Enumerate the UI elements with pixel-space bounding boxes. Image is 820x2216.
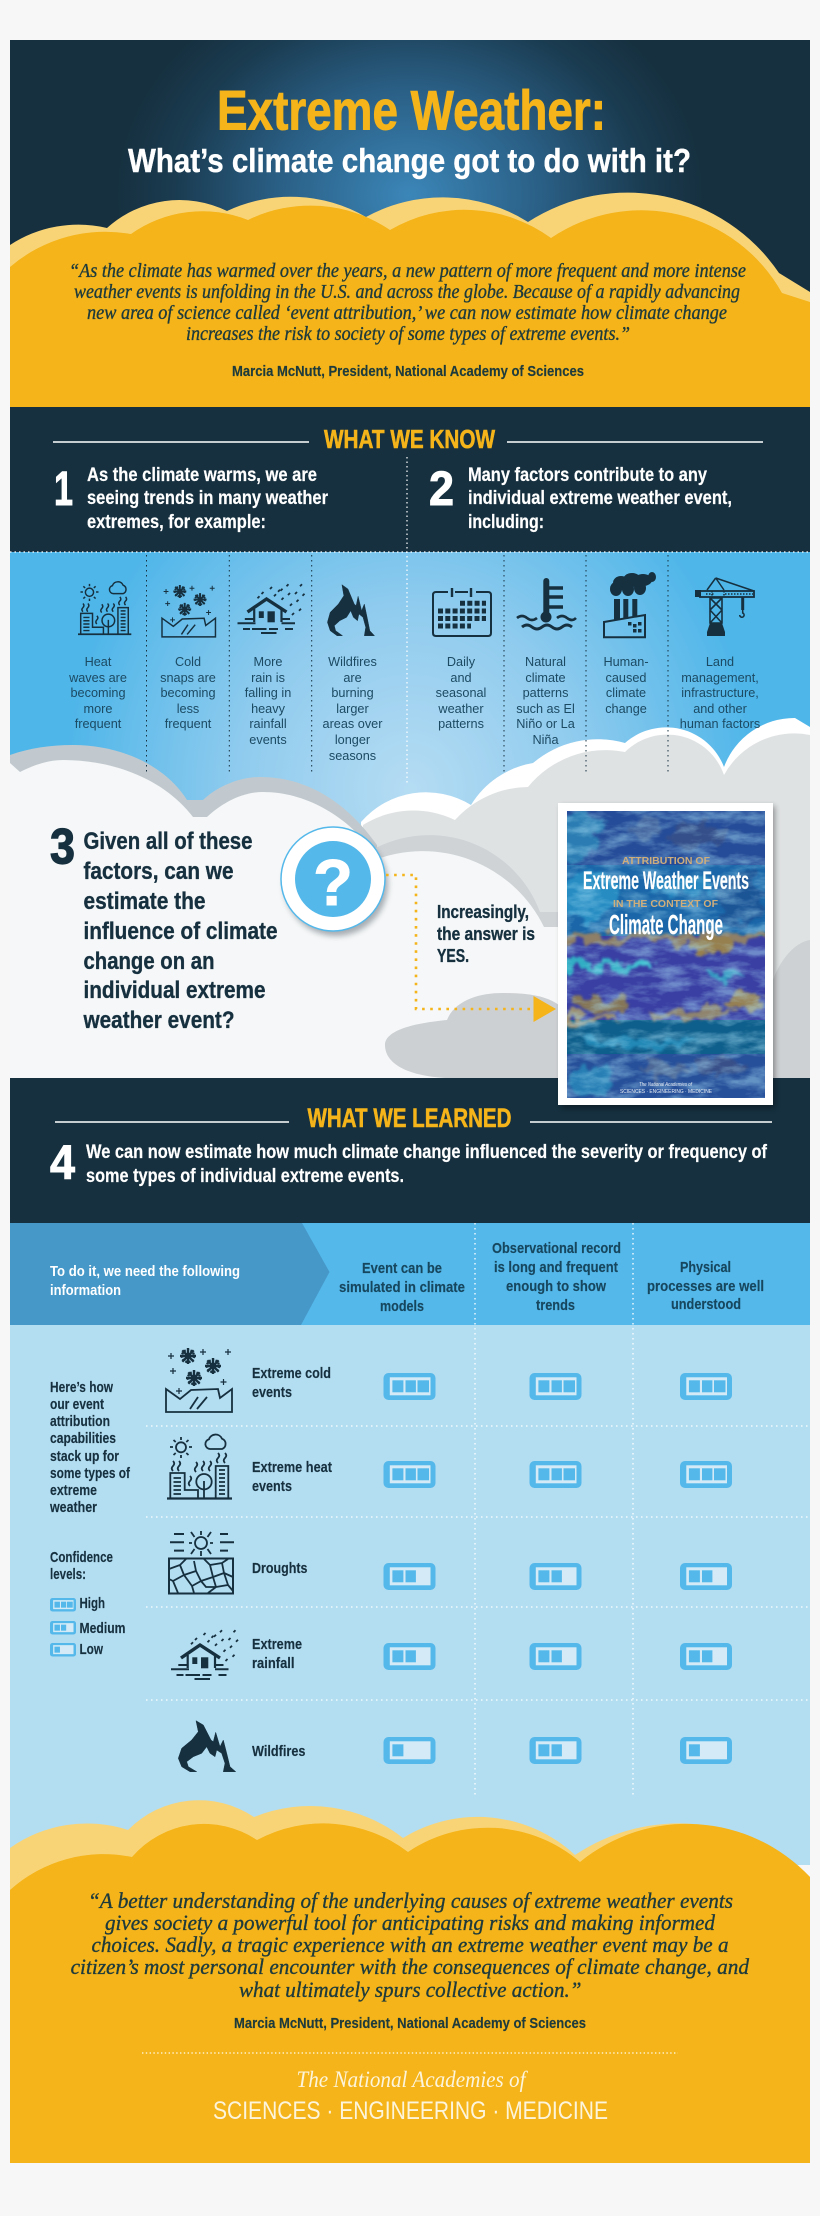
labels: factors: change — [605, 702, 647, 716]
labels: factors: human factors — [680, 717, 760, 731]
text: question: weather event? — [83, 1007, 234, 1034]
number 2: 2 — [429, 463, 454, 516]
text: point 2: including: — [468, 512, 544, 533]
labels: factors: patterns — [523, 686, 568, 700]
book title: SCIENCES · ENGINEERING · MEDICINE — [620, 1089, 713, 1095]
labels: factors: such as El — [516, 702, 575, 716]
text: point 2 — [468, 465, 732, 533]
labels: trends: rain is — [251, 671, 285, 685]
text: point 1: As the climate warms, we are — [87, 465, 317, 486]
icon: extreme heat — [167, 1435, 232, 1498]
header rule: what we know — [53, 441, 763, 443]
legend: confidence levels — [50, 1549, 126, 1658]
labels: trends: burning — [331, 686, 374, 700]
front cloud — [10, 206, 810, 407]
legend: confidence levels: High — [80, 1595, 105, 1612]
text: point 2: Many factors contribute to any — [468, 465, 707, 486]
text: answer: YES. — [437, 946, 469, 966]
labels: trends: More — [254, 655, 282, 669]
quote: bottom: gives society a powerful tool for anticipating risks and making informed — [105, 1910, 716, 1935]
column header 3: understood — [671, 1296, 741, 1313]
row label: extreme cold: Extreme cold — [252, 1365, 331, 1382]
book title: IN THE CONTEXT OF — [613, 898, 719, 910]
column header 1: Event can be — [362, 1260, 442, 1277]
labels: factors: management, — [681, 671, 759, 685]
text: point 4: some types of individual extreme events. — [86, 1166, 404, 1187]
text: answer — [437, 902, 535, 966]
quote: bottom: “A better understanding of the underlying causes of extreme weather events — [88, 1888, 733, 1913]
quote: top: weather events is unfolding in the U.S. and across the globe. Because of a rapidly advancing — [74, 281, 740, 303]
book title: Climate Change — [609, 909, 723, 940]
book title: ATTRIBUTION OF — [622, 855, 711, 867]
header rule: what we learned — [55, 1121, 772, 1123]
text: how capabilities stack up: extreme — [50, 1482, 97, 1499]
quote: top: new area of science called ‘event attribution,’ we can now estimate how climate change — [87, 302, 727, 324]
labels: trends: heavy — [251, 702, 286, 716]
confidence ratings: wildfires — [384, 1737, 732, 1764]
arrow: dotted to book — [386, 875, 556, 1022]
labels: factors: caused — [606, 671, 646, 685]
icon: extreme rainfall — [171, 1630, 238, 1679]
labels: trends: seasons — [329, 749, 376, 763]
labels: factors: Niño or La — [516, 717, 576, 731]
labels: trends: Wildfires — [328, 655, 377, 669]
text: question: Given all of these — [84, 828, 252, 855]
labels: factors: Land — [706, 655, 734, 669]
icon: heat waves — [78, 582, 131, 634]
labels: factors — [436, 655, 760, 747]
labels: trends: areas over — [323, 717, 383, 731]
text: point 1 — [87, 465, 329, 533]
text: how capabilities stack up: Here’s how — [50, 1379, 113, 1396]
labels: trends: more — [84, 702, 112, 716]
quote: top: “As the climate has warmed over the years, a new pattern of more frequent and more intense — [69, 260, 746, 282]
confidence ratings: extreme cold — [384, 1373, 732, 1400]
labels: trends: larger — [336, 702, 369, 716]
column header 1: models — [380, 1298, 424, 1315]
panel: blue icon band — [10, 552, 810, 892]
labels: trends: events — [249, 733, 287, 747]
icon: cold snaps — [162, 585, 215, 637]
column header 3: processes are well — [647, 1278, 764, 1295]
row label: extreme rainfall: Extreme — [252, 1636, 302, 1653]
confidence ratings: droughts — [384, 1563, 732, 1590]
text: point 2: individual extreme weather event, — [468, 488, 732, 509]
labels: factors: Daily — [447, 655, 476, 669]
row label: extreme heat — [252, 1459, 332, 1495]
labels: trends: are — [343, 671, 362, 685]
legend: confidence levels: Low — [80, 1641, 103, 1658]
title: Extreme Weather: — [217, 78, 606, 142]
text: how capabilities stack up: some types of — [50, 1465, 131, 1482]
icon: wildfire — [327, 585, 374, 636]
labels: trends: less — [177, 702, 199, 716]
column header 3 — [647, 1259, 764, 1313]
quote: bottom — [71, 1888, 750, 2002]
text: to do it — [50, 1263, 240, 1299]
logo: the national academies: SCIENCES · ENGINEERING · MEDICINE — [213, 2097, 608, 2125]
icon: rain on house — [238, 584, 304, 633]
icon: factory — [604, 572, 656, 637]
panel: lower cloud for answer — [372, 835, 559, 1078]
labels: trends: frequent — [165, 717, 212, 731]
confidence ratings: extreme rainfall — [384, 1643, 732, 1670]
quote attribution: bottom: Marcia McNutt, President, National Academy of Sciences — [234, 2016, 586, 2032]
column header 2: enough to show — [506, 1278, 606, 1295]
text: question — [83, 828, 277, 1034]
panel: right clouds — [361, 718, 810, 1078]
labels: factors: climate — [606, 686, 646, 700]
labels: trends — [68, 655, 383, 763]
quote attribution: top: Marcia McNutt, President, National Academy of Sciences — [232, 364, 584, 380]
text: point 1: extremes, for example: — [87, 512, 266, 533]
icon: extreme cold — [166, 1348, 232, 1412]
text: question: estimate the — [84, 888, 206, 915]
labels: factors: seasonal — [436, 686, 486, 700]
text: how capabilities stack up: attribution — [50, 1413, 110, 1430]
column header 2 — [492, 1240, 621, 1314]
icon: drought — [169, 1531, 234, 1594]
row label: extreme heat: events — [252, 1478, 292, 1495]
row label: extreme cold — [252, 1365, 331, 1401]
panel: left clouds — [10, 745, 385, 1078]
labels: factors: weather — [437, 702, 484, 716]
book cover — [558, 803, 775, 1108]
labels: factors: and other — [693, 702, 748, 716]
text: how capabilities stack up: weather — [49, 1499, 97, 1516]
labels: factors: and — [450, 671, 472, 685]
panel: table body — [10, 1325, 810, 1865]
text: question: influence of climate — [84, 918, 278, 945]
labels: factors: Niña — [532, 733, 559, 747]
icon: construction crane — [695, 578, 754, 636]
back cloud — [10, 193, 810, 320]
legend: confidence levels: Confidence — [50, 1549, 113, 1566]
labels: trends: rainfall — [249, 717, 287, 731]
row label: extreme rainfall: rainfall — [252, 1655, 294, 1672]
column header 1: simulated in climate — [339, 1279, 465, 1296]
book title — [583, 855, 749, 1095]
dividers: white dotted — [10, 457, 810, 783]
legend: confidence levels: Medium — [80, 1620, 126, 1637]
column header 3: Physical — [680, 1259, 731, 1276]
quote: bottom: what ultimately spurs collective action.” — [239, 1977, 582, 2002]
text: to do it: To do it, we need the following — [50, 1263, 240, 1280]
number 4: 4 — [50, 1137, 75, 1190]
quote: top — [69, 260, 746, 345]
column header 2: trends — [536, 1297, 575, 1314]
column header 2: Observational record — [492, 1240, 621, 1257]
labels: trends: becoming — [70, 686, 126, 700]
text: question: individual extreme — [84, 977, 266, 1004]
panel: footer — [10, 1800, 810, 2163]
confidence ratings: extreme heat — [384, 1461, 732, 1488]
text: answer: the answer is — [437, 924, 535, 944]
labels: factors: Natural — [525, 655, 566, 669]
subtitle: What’s climate change got to do with it? — [128, 142, 691, 179]
quote: bottom: citizen’s most personal encounter with the consequences of climate change, and — [71, 1954, 750, 1979]
quote: top: increases the risk to society of some types of extreme events.” — [186, 323, 630, 345]
labels: factors: patterns — [438, 717, 484, 731]
table dotted grid — [146, 1223, 810, 1797]
text: how capabilities stack up: stack up for — [50, 1448, 119, 1465]
column header 1 — [339, 1260, 465, 1315]
icon: wildfires — [178, 1721, 236, 1772]
row label: extreme rainfall — [252, 1636, 302, 1672]
number 1: 1 — [54, 463, 73, 516]
dividers: dark dotted — [146, 555, 668, 775]
quote: bottom: choices. Sadly, a tragic experience with an extreme weather event may be a — [92, 1932, 728, 1957]
text: how capabilities stack up: capabilities — [50, 1430, 116, 1447]
labels: trends: becoming — [160, 686, 216, 700]
labels: factors: infrastructure, — [681, 686, 759, 700]
text: question: factors, can we — [84, 858, 234, 885]
labels: trends: falling in — [245, 686, 291, 700]
icon: question mark: ? — [313, 846, 353, 919]
labels: trends: Cold — [175, 655, 201, 669]
labels: factors: Human- — [603, 655, 649, 669]
text: to do it: information — [50, 1282, 121, 1299]
logo: the national academies — [213, 2067, 608, 2125]
logo: the national academies: The National Academies of — [296, 2067, 529, 2092]
labels: trends: waves are — [68, 671, 127, 685]
labels: trends: Heat — [85, 655, 112, 669]
legend: confidence levels: levels: — [50, 1566, 86, 1583]
row label: extreme heat: Extreme heat — [252, 1459, 332, 1476]
text: point 1: seeing trends in many weather — [87, 488, 329, 509]
row label: wildfires: Wildfires — [252, 1743, 306, 1760]
row label: droughts: Droughts — [252, 1560, 308, 1577]
icon: question mark — [281, 827, 388, 936]
text: point 4 — [86, 1142, 768, 1187]
icon: thermometer in water — [517, 578, 576, 629]
text: how capabilities stack up: our event — [50, 1396, 104, 1413]
labels: trends: longer — [335, 733, 371, 747]
column header 2: is long and frequent — [494, 1259, 618, 1276]
heading: what we learned: WHAT WE LEARNED — [308, 1103, 512, 1133]
book title: The National Academies of — [639, 1082, 693, 1088]
panel: what we know — [10, 407, 810, 553]
icon: calendar — [433, 588, 491, 636]
text: how capabilities stack up — [49, 1379, 131, 1516]
panel: what we learned — [10, 1078, 810, 1224]
number 3: 3 — [50, 818, 75, 874]
panel: header — [10, 40, 810, 408]
text: answer: Increasingly, — [437, 902, 529, 922]
panel: table header — [10, 1223, 810, 1325]
row label: extreme cold: events — [252, 1384, 292, 1401]
labels: trends: frequent — [75, 717, 122, 731]
heading: what we know: WHAT WE KNOW — [324, 424, 495, 454]
text: question: change on an — [84, 948, 214, 975]
labels: trends: snaps are — [160, 671, 216, 685]
labels: factors: climate — [525, 671, 566, 685]
